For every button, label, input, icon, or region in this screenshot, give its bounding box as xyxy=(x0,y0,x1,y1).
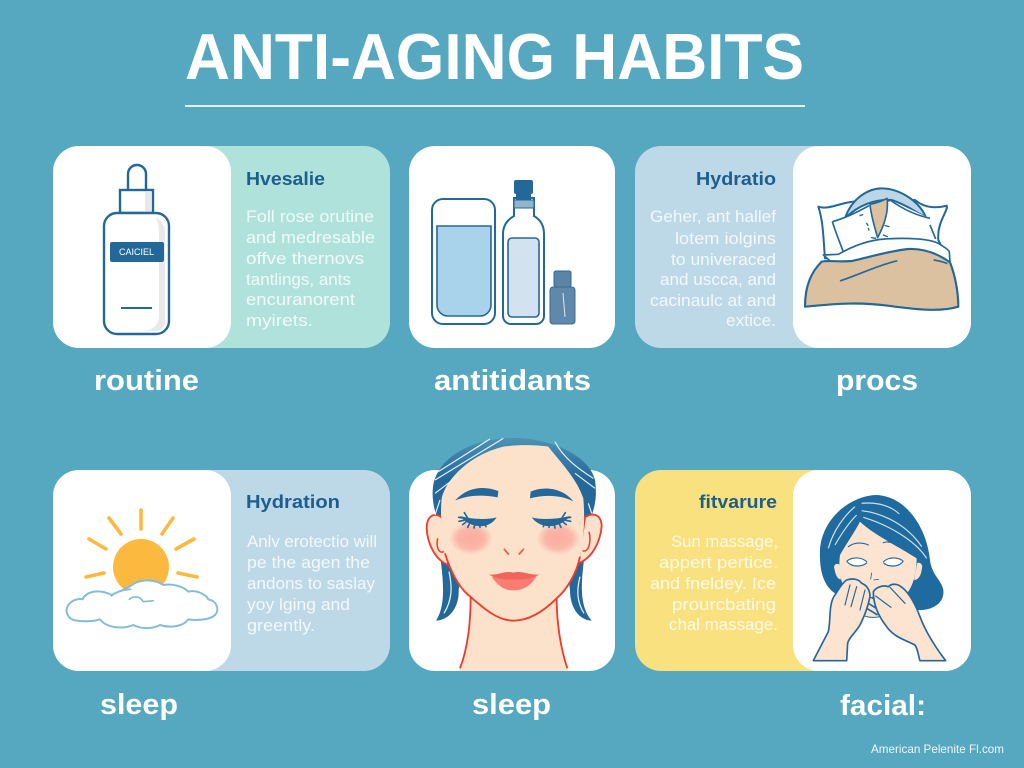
text: facial massage card: prourcbating xyxy=(672,595,776,614)
text: routine card: Foll rose orutine xyxy=(246,207,374,226)
text: procs card: Geher, ant hallef xyxy=(650,207,776,226)
icon: sun and cloud xyxy=(67,510,217,628)
text: sun protection card: Hydration xyxy=(246,492,340,512)
label: routine: routine xyxy=(94,365,199,397)
text: procs card: Hydratio xyxy=(696,169,776,189)
icon: serum dropper bottle xyxy=(104,165,169,334)
label: facial: facial: xyxy=(840,690,926,722)
text: sun protection card: yoy lging and xyxy=(247,595,350,614)
text: routine card: myirets. xyxy=(246,311,313,330)
text: routine card: tantlings, ants xyxy=(246,270,351,289)
icon: jar and bottles xyxy=(432,180,575,324)
text: facial massage card: chal massage. xyxy=(669,615,778,634)
panel: procs xyxy=(635,146,971,348)
text: facial massage card: fitvarure xyxy=(699,492,777,512)
text: procs card: to univeraced xyxy=(671,250,776,269)
label: antitidants: antitidants xyxy=(434,365,591,397)
title: ANTI-AGING HABITS xyxy=(185,20,804,93)
panel: face xyxy=(409,438,615,671)
text: facial massage card: appert pertice. xyxy=(659,553,778,572)
text: facial massage card: Sun massage, xyxy=(671,532,778,551)
panel: antioxidants xyxy=(409,146,615,348)
panel: sun protection xyxy=(53,470,390,671)
text: routine card xyxy=(246,169,375,330)
text: procs card: and uscca, and xyxy=(660,270,776,289)
icon: woman massaging face xyxy=(813,495,946,661)
label: procs: procs xyxy=(836,365,918,397)
icon: woman's face with closed eyes xyxy=(427,438,602,671)
text: facial massage card: and fneldey. Ice xyxy=(650,574,776,593)
text: sun protection card: greently. xyxy=(247,616,315,635)
text: procs card: lotem iolgins xyxy=(675,229,776,248)
panel: facial massage xyxy=(635,470,971,671)
icon: person in bed xyxy=(805,188,958,310)
label: sleep centre: sleep xyxy=(472,689,551,721)
text: sun protection card: Anlv erotectio will xyxy=(247,532,377,551)
text: procs card: cacinaulc at and xyxy=(650,291,776,310)
text: procs card xyxy=(650,169,776,330)
text: procs card: extice. xyxy=(726,311,776,330)
text: routine card: offve thernovs xyxy=(246,249,364,268)
text: routine card: Hvesalie xyxy=(246,169,325,189)
text: sun protection card: andons to saslay xyxy=(247,574,375,593)
text: sun protection card: pe the agen the xyxy=(247,553,370,572)
text: routine card: and medresable xyxy=(246,228,375,247)
icon: serum dropper bottle: CAICIEL xyxy=(119,247,154,258)
text: sun protection card xyxy=(246,492,377,635)
label: sleep left: sleep xyxy=(100,689,178,721)
footer credit: American Pelenite Fl.com xyxy=(871,742,1004,756)
panel: routine xyxy=(53,146,390,348)
text: routine card: encuranorent xyxy=(246,290,355,309)
text: facial massage card xyxy=(650,492,778,634)
